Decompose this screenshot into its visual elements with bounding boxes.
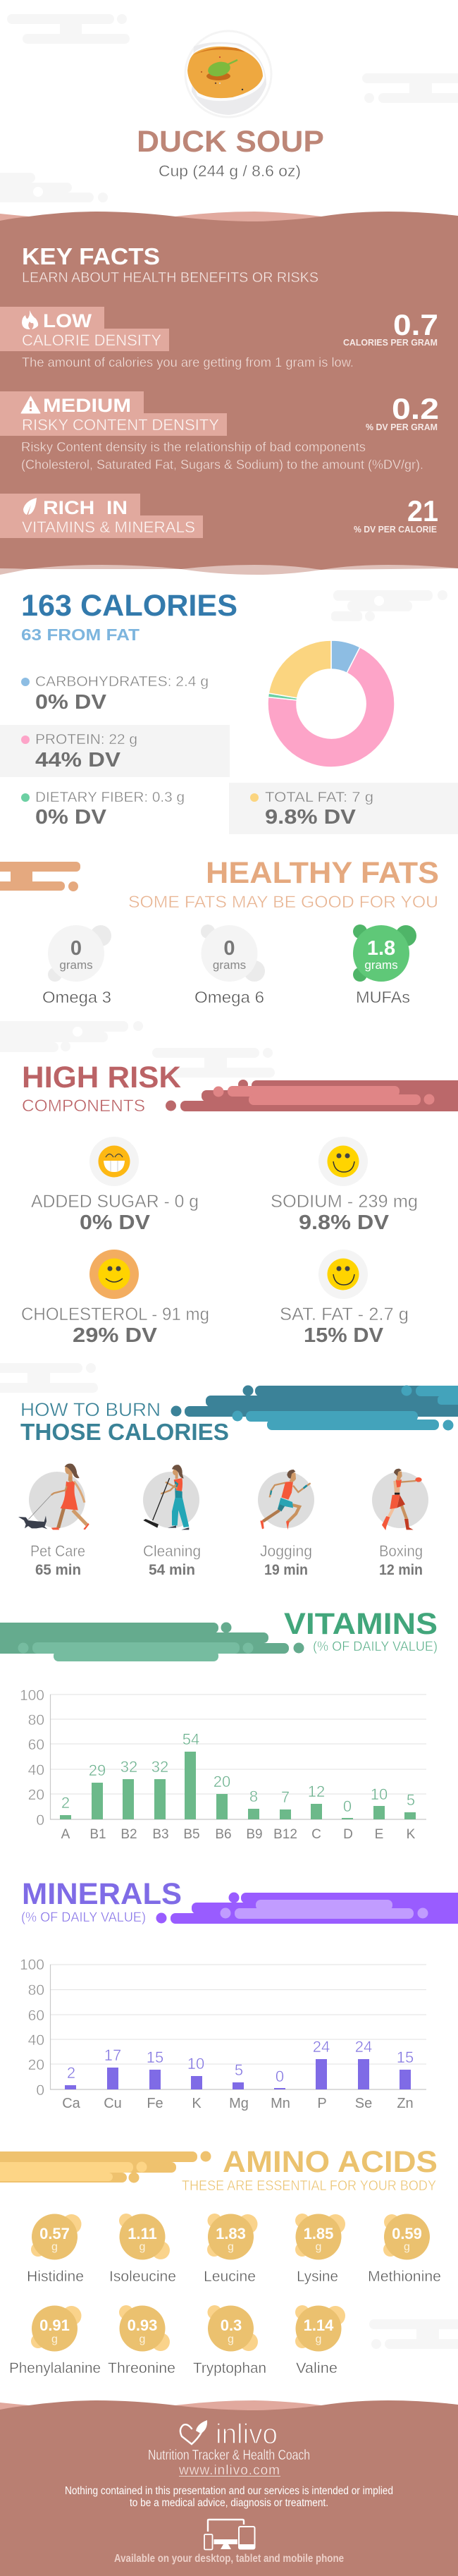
added sugar text (31, 1192, 199, 1234)
saturated fat text: SAT. FAT - 2.7 g (280, 1305, 409, 1324)
badge: mufas: MUFAs (356, 988, 410, 1006)
bar chart: vitamins: 10 (371, 1786, 388, 1803)
bar chart: vitamins: K (407, 1827, 416, 1842)
label: Boxing (379, 1542, 423, 1560)
amino: methionine: Methionine (368, 2269, 441, 2285)
badge: omega 3: grams (59, 958, 93, 972)
amino: lysine: Lysine (297, 2269, 338, 2285)
bar chart: minerals: 100 (20, 1957, 44, 1973)
background cloud lower right (369, 2319, 458, 2349)
bar chart: vitamins: A (61, 1827, 70, 1842)
subheading: SOME FATS MAY BE GOOD FOR YOU (128, 893, 438, 912)
subheading: components: COMPONENTS (22, 1097, 145, 1116)
label: VITAMINS & MINERALS (22, 518, 195, 536)
amino: phenylalanine: Phenylalanine (9, 2360, 101, 2376)
header shape: minerals (156, 1893, 458, 1924)
header shape: healthy fats (0, 862, 80, 891)
amino: lysine: g (316, 2241, 321, 2253)
amino: methionine: g (404, 2241, 410, 2253)
sodium text (271, 1192, 418, 1234)
label: Cleaning (143, 1542, 201, 1560)
bar chart: vitamins: 5 (407, 1791, 415, 1809)
sodium text: 9.8% DV (299, 1211, 390, 1234)
activity: cleaning (143, 1465, 201, 1578)
icon: inlivo heart logo (180, 2420, 207, 2444)
website link: www.inlivo.com (178, 2463, 280, 2478)
amino: threonine: Threonine (108, 2360, 175, 2376)
icon: flame (22, 310, 38, 329)
amino: phenylalanine (9, 2306, 101, 2376)
amino: histidine: g (51, 2241, 58, 2253)
unit: % DV PER GRAM (366, 422, 438, 432)
description: The amount of calories you are getting from 1 gram is low. (22, 355, 354, 370)
bar chart: vitamins: E (375, 1827, 383, 1842)
legend: carbohydrates: 0% DV (35, 691, 107, 714)
background cloud top left (7, 14, 130, 44)
serving size: Cup (244 g / 8.6 oz) (159, 162, 301, 180)
badge: omega 6: 0 (223, 937, 235, 960)
icon: leaf (23, 498, 37, 515)
bar chart: vitamins: D (343, 1827, 353, 1842)
bar chart: minerals: 0 (36, 2082, 44, 2099)
bar chart: vitamins: 12 (308, 1783, 325, 1800)
heading: minerals: MINERALS (22, 1877, 182, 1911)
amino: lysine (295, 2214, 345, 2285)
donut chart (268, 640, 395, 767)
bar chart: minerals (20, 1957, 426, 2111)
subheading: LEARN ABOUT HEALTH BENEFITS OR RISKS (22, 270, 318, 286)
figure: boxer (382, 1469, 422, 1530)
background cloud mid (152, 1048, 275, 1078)
background cloud calories (331, 590, 447, 621)
bar chart: minerals: 0 (276, 2068, 284, 2085)
disclaimer: to be a medical advice, diagnosis or treatment. (130, 2497, 328, 2509)
amino: lysine: 1.85 (304, 2225, 333, 2242)
bar chart: vitamins: B6 (215, 1827, 232, 1842)
bar chart: vitamins: 20 (213, 1773, 230, 1790)
label: CALORIE DENSITY (22, 331, 161, 349)
amino: isoleucine: 1.11 (128, 2225, 157, 2242)
badge: omega 3: Omega 3 (42, 988, 111, 1006)
header shape: burn calories (171, 1385, 458, 1430)
amino: tryptophan: g (228, 2333, 234, 2345)
icon: soup bowl (185, 31, 271, 117)
background cloud mid left (0, 1021, 143, 1052)
amino: tryptophan: Tryptophan (193, 2360, 266, 2376)
bar chart: minerals: 60 (28, 2008, 44, 2024)
badge: mufas: grams (364, 958, 398, 972)
subheading: (% OF DAILY VALUE) (313, 1640, 438, 1654)
legend row backgrounds (0, 725, 458, 834)
icon: smiling face sodium (318, 1137, 368, 1186)
bar chart: vitamins: 20 (28, 1787, 44, 1803)
rating: MEDIUM (43, 395, 131, 416)
badge: mufas (353, 924, 416, 1006)
bar chart: minerals: 40 (28, 2032, 44, 2049)
figure: woman walking dog (18, 1463, 89, 1530)
amino: methionine (368, 2214, 441, 2285)
bar chart: minerals: Mn (271, 2096, 290, 2111)
legend: dietary fiber: 0% DV (35, 806, 107, 829)
background cloud top right (362, 73, 458, 103)
disclaimer (65, 2485, 393, 2509)
tagline: Nutrition Tracker & Health Coach (148, 2448, 310, 2463)
bar chart: vitamins: 8 (249, 1788, 258, 1805)
bar chart: vitamins: B9 (246, 1827, 263, 1842)
logo wordmark: inlivo (216, 2419, 278, 2450)
bar chart: vitamins: B2 (120, 1827, 137, 1842)
amino: histidine: Histidine (27, 2269, 84, 2285)
sodium text: SODIUM - 239 mg (271, 1192, 418, 1211)
amino: isoleucine (109, 2214, 176, 2285)
bar chart: minerals: Cu (104, 2096, 122, 2111)
bar chart: minerals: 17 (104, 2046, 121, 2064)
amino: histidine (27, 2214, 84, 2285)
legend: dietary fiber: DIETARY FIBER: 0.3 g (35, 790, 185, 805)
heading: high risk: HIGH RISK (22, 1061, 181, 1094)
amino: tryptophan (193, 2305, 266, 2376)
panel: key facts (0, 212, 458, 575)
value: 0.2 (392, 392, 439, 425)
header shape: high risk (166, 1080, 458, 1111)
rating: LOW (43, 310, 92, 331)
amino: valine (295, 2305, 345, 2376)
badge: omega 3 (42, 925, 111, 1006)
bar chart: vitamins: 0 (343, 1797, 352, 1815)
amino: valine: g (316, 2333, 321, 2345)
duration: 54 min (149, 1562, 195, 1578)
bar chart: minerals: Zn (397, 2096, 414, 2111)
bar chart: vitamins: 0 (36, 1812, 44, 1829)
unit: CALORIES PER GRAM (343, 338, 438, 348)
figure: person sweeping (143, 1465, 189, 1530)
amino: leucine (204, 2214, 258, 2285)
bar chart: minerals: 5 (235, 2061, 243, 2079)
bar chart: minerals: 10 (187, 2055, 204, 2073)
bar chart: vitamins: 32 (120, 1758, 137, 1776)
header shape: vitamins (0, 1622, 304, 1661)
legend: dietary fiber (21, 790, 185, 829)
unit: % DV PER CALORIE (354, 525, 437, 535)
cholesterol text (21, 1305, 209, 1347)
badge: omega 6 (194, 924, 265, 1006)
activity: pet care (18, 1463, 89, 1578)
subheading: (% OF DAILY VALUE) (21, 1910, 146, 1925)
subheading: THESE ARE ESSENTIAL FOR YOUR BODY (182, 2178, 436, 2194)
cholesterol text: CHOLESTEROL - 91 mg (21, 1305, 209, 1324)
bar chart: minerals: P (317, 2096, 327, 2111)
availability note: Available on your desktop, tablet and mobile phone (114, 2553, 344, 2565)
cholesterol text: 29% DV (73, 1324, 158, 1347)
amino: leucine: g (228, 2241, 234, 2253)
icon: smiling face cholesterol (89, 1250, 139, 1299)
heading: calories: 163 CALORIES (21, 589, 237, 623)
badge: mufas: 1.8 (367, 937, 395, 960)
legend: protein (21, 732, 137, 771)
badge: omega 6: grams (213, 958, 246, 972)
bar chart: vitamins: 100 (20, 1687, 44, 1704)
badge: omega 3: 0 (70, 937, 82, 960)
value: 0.7 (393, 308, 438, 341)
label: Pet Care (30, 1542, 85, 1560)
bar chart: vitamins: B5 (183, 1827, 200, 1842)
bar chart: vitamins (20, 1687, 426, 1842)
bar chart: minerals: Ca (62, 2096, 81, 2111)
panel: footer (0, 2400, 458, 2576)
rich in block (0, 494, 438, 538)
amino: isoleucine: g (140, 2241, 145, 2253)
calorie density block (0, 307, 438, 370)
value: 21 (407, 494, 438, 527)
bar chart: minerals: Fe (147, 2096, 163, 2111)
bar chart: minerals: 15 (397, 2049, 414, 2066)
bar chart: minerals: 24 (355, 2038, 372, 2056)
heading: key facts: KEY FACTS (22, 243, 160, 269)
saturated fat text: 15% DV (304, 1324, 384, 1347)
icon: grinning face (89, 1137, 139, 1186)
duration: 19 min (264, 1562, 308, 1578)
subheading: from fat: 63 FROM FAT (21, 625, 140, 644)
heading: vitamins: VITAMINS (284, 1607, 438, 1641)
legend: protein: PROTEIN: 22 g (35, 732, 137, 747)
amino: phenylalanine: 0.91 (39, 2316, 70, 2334)
badge: omega 6: Omega 6 (194, 988, 264, 1006)
amino: phenylalanine: g (51, 2333, 58, 2345)
icon: warning (21, 396, 40, 413)
background cloud lower left (0, 1363, 98, 1393)
activity: boxing (372, 1469, 428, 1578)
background cloud left (0, 173, 108, 202)
bar chart: minerals: 80 (28, 1982, 44, 1998)
legend: total fat (250, 790, 373, 829)
disclaimer: Nothing contained in this presentation and our services is intended or implied (65, 2485, 393, 2497)
bar chart: minerals: 20 (28, 2057, 44, 2073)
bar chart: vitamins: B3 (152, 1827, 169, 1842)
label: Jogging (260, 1542, 312, 1560)
legend: total fat: TOTAL FAT: 7 g (265, 790, 373, 805)
amino: isoleucine: Isoleucine (109, 2269, 176, 2285)
icon: devices (204, 2520, 255, 2550)
heading: how to burn: HOW TO BURN (20, 1399, 161, 1420)
amino: threonine (108, 2305, 175, 2376)
bar chart: minerals: K (192, 2096, 202, 2111)
header shape: amino acids (0, 2151, 211, 2183)
amino: threonine: g (140, 2333, 145, 2345)
amino: threonine: 0.93 (128, 2316, 157, 2334)
bar chart: minerals: 15 (147, 2049, 163, 2066)
description: (Cholesterol, Saturated Fat, Sugars & Sodium) to the amount (%DV/gr). (21, 458, 423, 472)
heading: healthy fats: HEALTHY FATS (206, 856, 439, 890)
bar chart: vitamins: B1 (89, 1827, 106, 1842)
description: Risky Content density is the relationship of bad components (21, 440, 366, 454)
bar chart: minerals: Se (355, 2096, 372, 2111)
amino: leucine: 1.83 (216, 2225, 246, 2242)
duration: 12 min (379, 1562, 423, 1578)
heading: amino acids: AMINO ACIDS (223, 2145, 438, 2179)
added sugar text: ADDED SUGAR - 0 g (31, 1192, 199, 1211)
bar chart: minerals: 24 (313, 2038, 330, 2056)
bar chart: vitamins: 60 (28, 1737, 44, 1753)
amino: valine: 1.14 (304, 2316, 334, 2334)
rating: RICH IN (43, 497, 128, 518)
bar chart: vitamins: 54 (182, 1730, 199, 1748)
figure: runner (260, 1470, 311, 1530)
icon: smiling face saturated fat (318, 1250, 368, 1299)
bar chart: vitamins: 2 (61, 1794, 70, 1812)
bar chart: minerals: 2 (67, 2064, 75, 2082)
amino: valine: Valine (296, 2360, 338, 2376)
bar chart: vitamins: 40 (28, 1762, 44, 1778)
added sugar text: 0% DV (80, 1211, 151, 1234)
amino: tryptophan: 0.3 (221, 2316, 242, 2334)
activity: jogging (258, 1470, 314, 1578)
heading: those calories: THOSE CALORIES (20, 1419, 229, 1445)
bar chart: vitamins: 7 (281, 1788, 290, 1806)
amino: methionine: 0.59 (392, 2225, 422, 2242)
bar chart: vitamins: 29 (89, 1762, 106, 1779)
saturated fat text (280, 1305, 409, 1347)
description (21, 440, 423, 472)
bar chart: vitamins: 80 (28, 1712, 44, 1728)
legend: total fat: 9.8% DV (265, 806, 357, 829)
amino: leucine: Leucine (204, 2269, 256, 2285)
risky content block (0, 391, 439, 472)
legend: carbohydrates (21, 674, 209, 714)
bar chart: vitamins: 32 (151, 1758, 168, 1776)
bar chart: vitamins: B12 (273, 1827, 297, 1842)
amino: histidine: 0.57 (39, 2225, 70, 2242)
title: DUCK SOUP (137, 125, 324, 159)
bar chart: vitamins: C (311, 1827, 321, 1842)
duration: 65 min (35, 1562, 81, 1578)
label: RISKY CONTENT DENSITY (22, 416, 219, 434)
legend: carbohydrates: CARBOHYDRATES: 2.4 g (35, 674, 209, 690)
bar chart: minerals: Mg (229, 2096, 249, 2111)
legend: protein: 44% DV (35, 749, 121, 771)
